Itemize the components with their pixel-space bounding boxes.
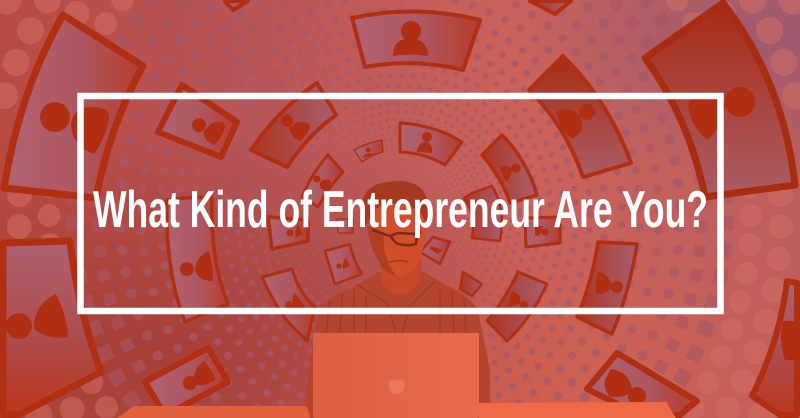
screen: bottom-left phone (145, 348, 228, 415)
apple logo (389, 380, 405, 394)
glasses (372, 230, 421, 245)
screen: right of cheek (420, 237, 450, 264)
shirt stripes (326, 282, 466, 333)
screen: behind title centre-left (268, 217, 308, 249)
desk right (479, 402, 676, 418)
screen: right of head small (464, 186, 502, 241)
screen: by right shoulder (460, 272, 482, 296)
screen: right edge (752, 281, 800, 415)
screen: behind title right (525, 217, 560, 247)
mouth (390, 260, 408, 262)
person at laptop (306, 181, 490, 418)
screen: bottom-left large (3, 241, 101, 415)
screen: small top of head right (400, 123, 462, 165)
screen: top-left phone (158, 85, 237, 157)
screen: tiny near centre (354, 140, 383, 162)
screen: top centre (352, 11, 480, 70)
title frame (80, 96, 720, 311)
screen: right of centre (529, 56, 631, 177)
desk left (117, 406, 310, 418)
screen: small behind E (337, 219, 353, 233)
screen: top-right large (645, 3, 795, 197)
screen: below title centre-left (262, 269, 315, 341)
neck (380, 258, 422, 295)
screen: cropped at top right (530, 1, 571, 14)
screen: right of head upper (482, 135, 537, 203)
screen: cropped at top left (225, 1, 248, 10)
face shadow (367, 226, 396, 276)
screen: left of chin (325, 244, 362, 284)
screen: tall right below title (577, 242, 637, 334)
screen: top-left large (4, 15, 143, 198)
laptop (313, 333, 479, 418)
screen: below title right (487, 272, 547, 341)
screen: small upper-left of head (302, 155, 343, 207)
body and shirt (306, 272, 490, 418)
screen: upper-left dark (251, 83, 336, 167)
screen: bottom-right tablet (587, 353, 697, 415)
screen: tall left behind title (167, 197, 228, 322)
hair (362, 181, 429, 228)
face (367, 184, 426, 277)
